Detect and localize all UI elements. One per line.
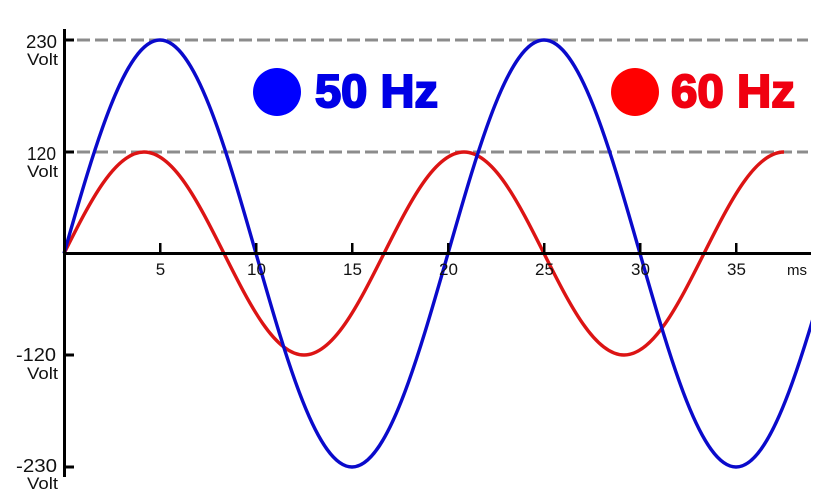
y axis labels: [16, 32, 58, 493]
x axis labels: 15: [343, 260, 362, 279]
y axis labels: 230: [26, 32, 57, 52]
vertical axis with ticks: [63, 29, 74, 477]
legend: 60 Hz: 60 Hz: [671, 65, 795, 117]
legend: 50 Hz: [253, 65, 438, 117]
y axis labels: Volt: [27, 474, 58, 493]
legend: 50 Hz: 50 Hz: [315, 65, 438, 117]
x axis labels: 25: [535, 260, 554, 279]
x axis labels: ms: [787, 262, 807, 279]
curve: 50 Hz blue wave: [64, 40, 820, 467]
x axis labels: 35: [727, 260, 746, 279]
y axis labels: Volt: [27, 162, 58, 181]
horizontal axis with ticks: [64, 243, 811, 255]
reference line: 230 volt: [77, 38, 808, 42]
y axis labels: 120: [27, 144, 56, 164]
x axis labels: 20: [439, 260, 458, 279]
y axis labels: Volt: [27, 364, 58, 383]
x axis labels: 30: [631, 260, 650, 279]
y axis labels: -120: [16, 345, 56, 365]
curve: 60 Hz red wave: [64, 152, 784, 355]
legend: 60 Hz: [611, 65, 795, 117]
x axis labels: [156, 260, 807, 279]
reference line: 120 volt: [77, 150, 808, 154]
x axis labels: 5: [156, 260, 165, 279]
y axis labels: -230: [16, 456, 57, 476]
y axis labels: Volt: [27, 50, 58, 69]
x axis labels: 10: [247, 260, 266, 279]
